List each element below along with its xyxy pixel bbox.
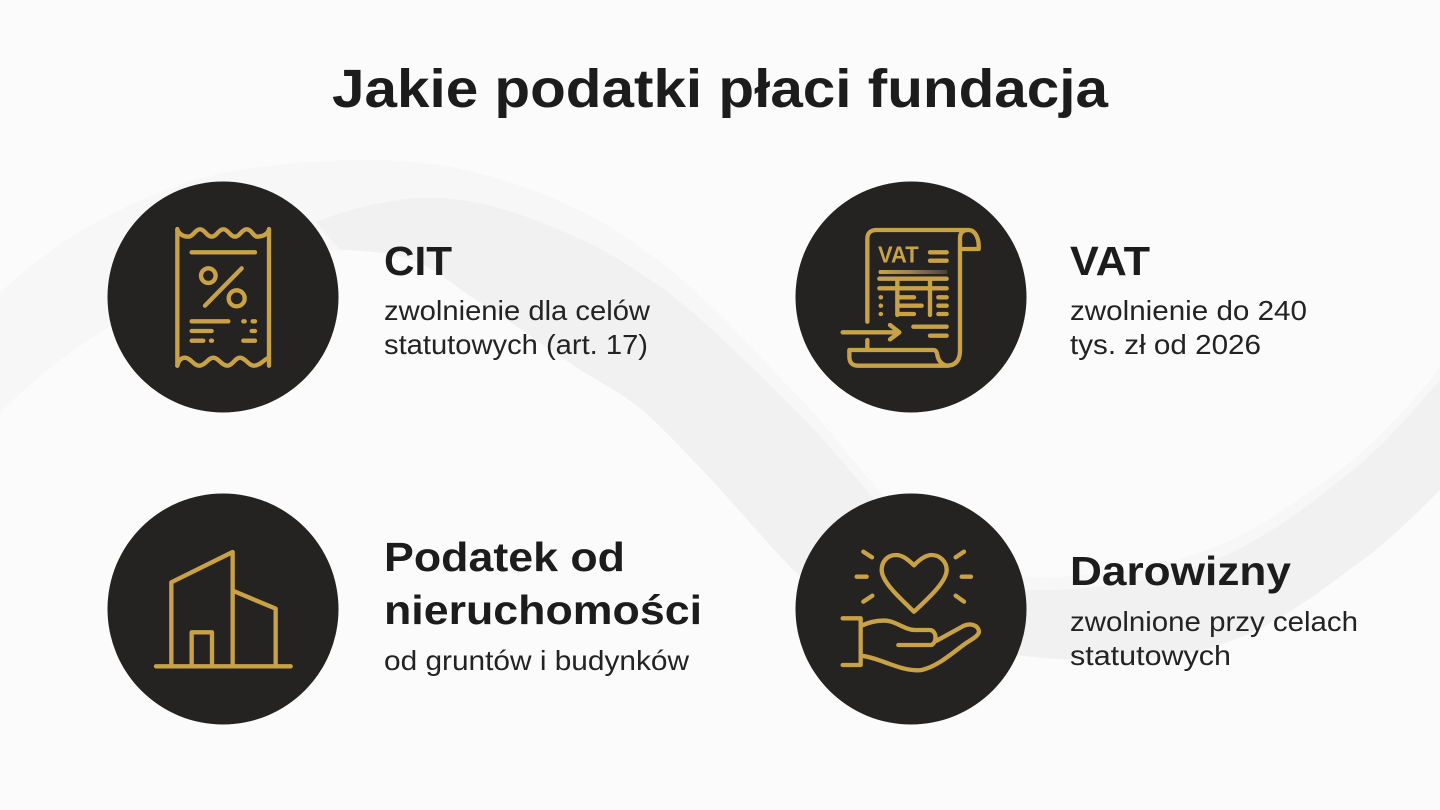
heading: Podatek od nieruchomości: nieruchomości xyxy=(384,587,702,633)
icon: receipt with percent xyxy=(177,229,269,366)
text: CIT description xyxy=(384,295,650,360)
icon: VAT document scroll: VAT xyxy=(878,241,919,267)
icon: hand holding heart xyxy=(843,552,979,670)
text: donations description: statutowych xyxy=(1070,640,1231,671)
text: donations description xyxy=(1070,606,1358,671)
icon: building xyxy=(156,552,291,666)
text: CIT description: zwolnienie dla celów xyxy=(384,295,650,326)
icon circle: VAT xyxy=(796,182,1026,412)
panel: Darowizny xyxy=(796,494,1358,724)
panel: Podatek od nieruchomości xyxy=(108,494,702,724)
title: Jakie podatki płaci fundacja xyxy=(332,59,1109,119)
text: VAT description xyxy=(1070,295,1307,360)
heading: VAT: VAT xyxy=(1070,238,1150,284)
panel: VAT xyxy=(796,182,1307,412)
heading: Darowizny: Darowizny xyxy=(1070,548,1291,594)
panel: CIT xyxy=(108,182,650,412)
heading: CIT: CIT xyxy=(384,238,452,284)
text: VAT description: zwolnienie do 240 xyxy=(1070,295,1307,326)
heading: Podatek od nieruchomości: Podatek od xyxy=(384,534,625,580)
icon circle: CIT xyxy=(108,182,338,412)
icon circle: property tax xyxy=(108,494,338,724)
heading: Podatek od nieruchomości xyxy=(384,534,702,633)
icon circle: donations xyxy=(796,494,1026,724)
text: donations description: zwolnione przy celach xyxy=(1070,606,1358,637)
icon: VAT document scroll xyxy=(843,230,979,366)
text: property tax description: od gruntów i budynków xyxy=(384,645,689,676)
text: CIT description: statutowych (art. 17) xyxy=(384,329,648,360)
text: VAT description: tys. zł od 2026 xyxy=(1070,329,1261,360)
